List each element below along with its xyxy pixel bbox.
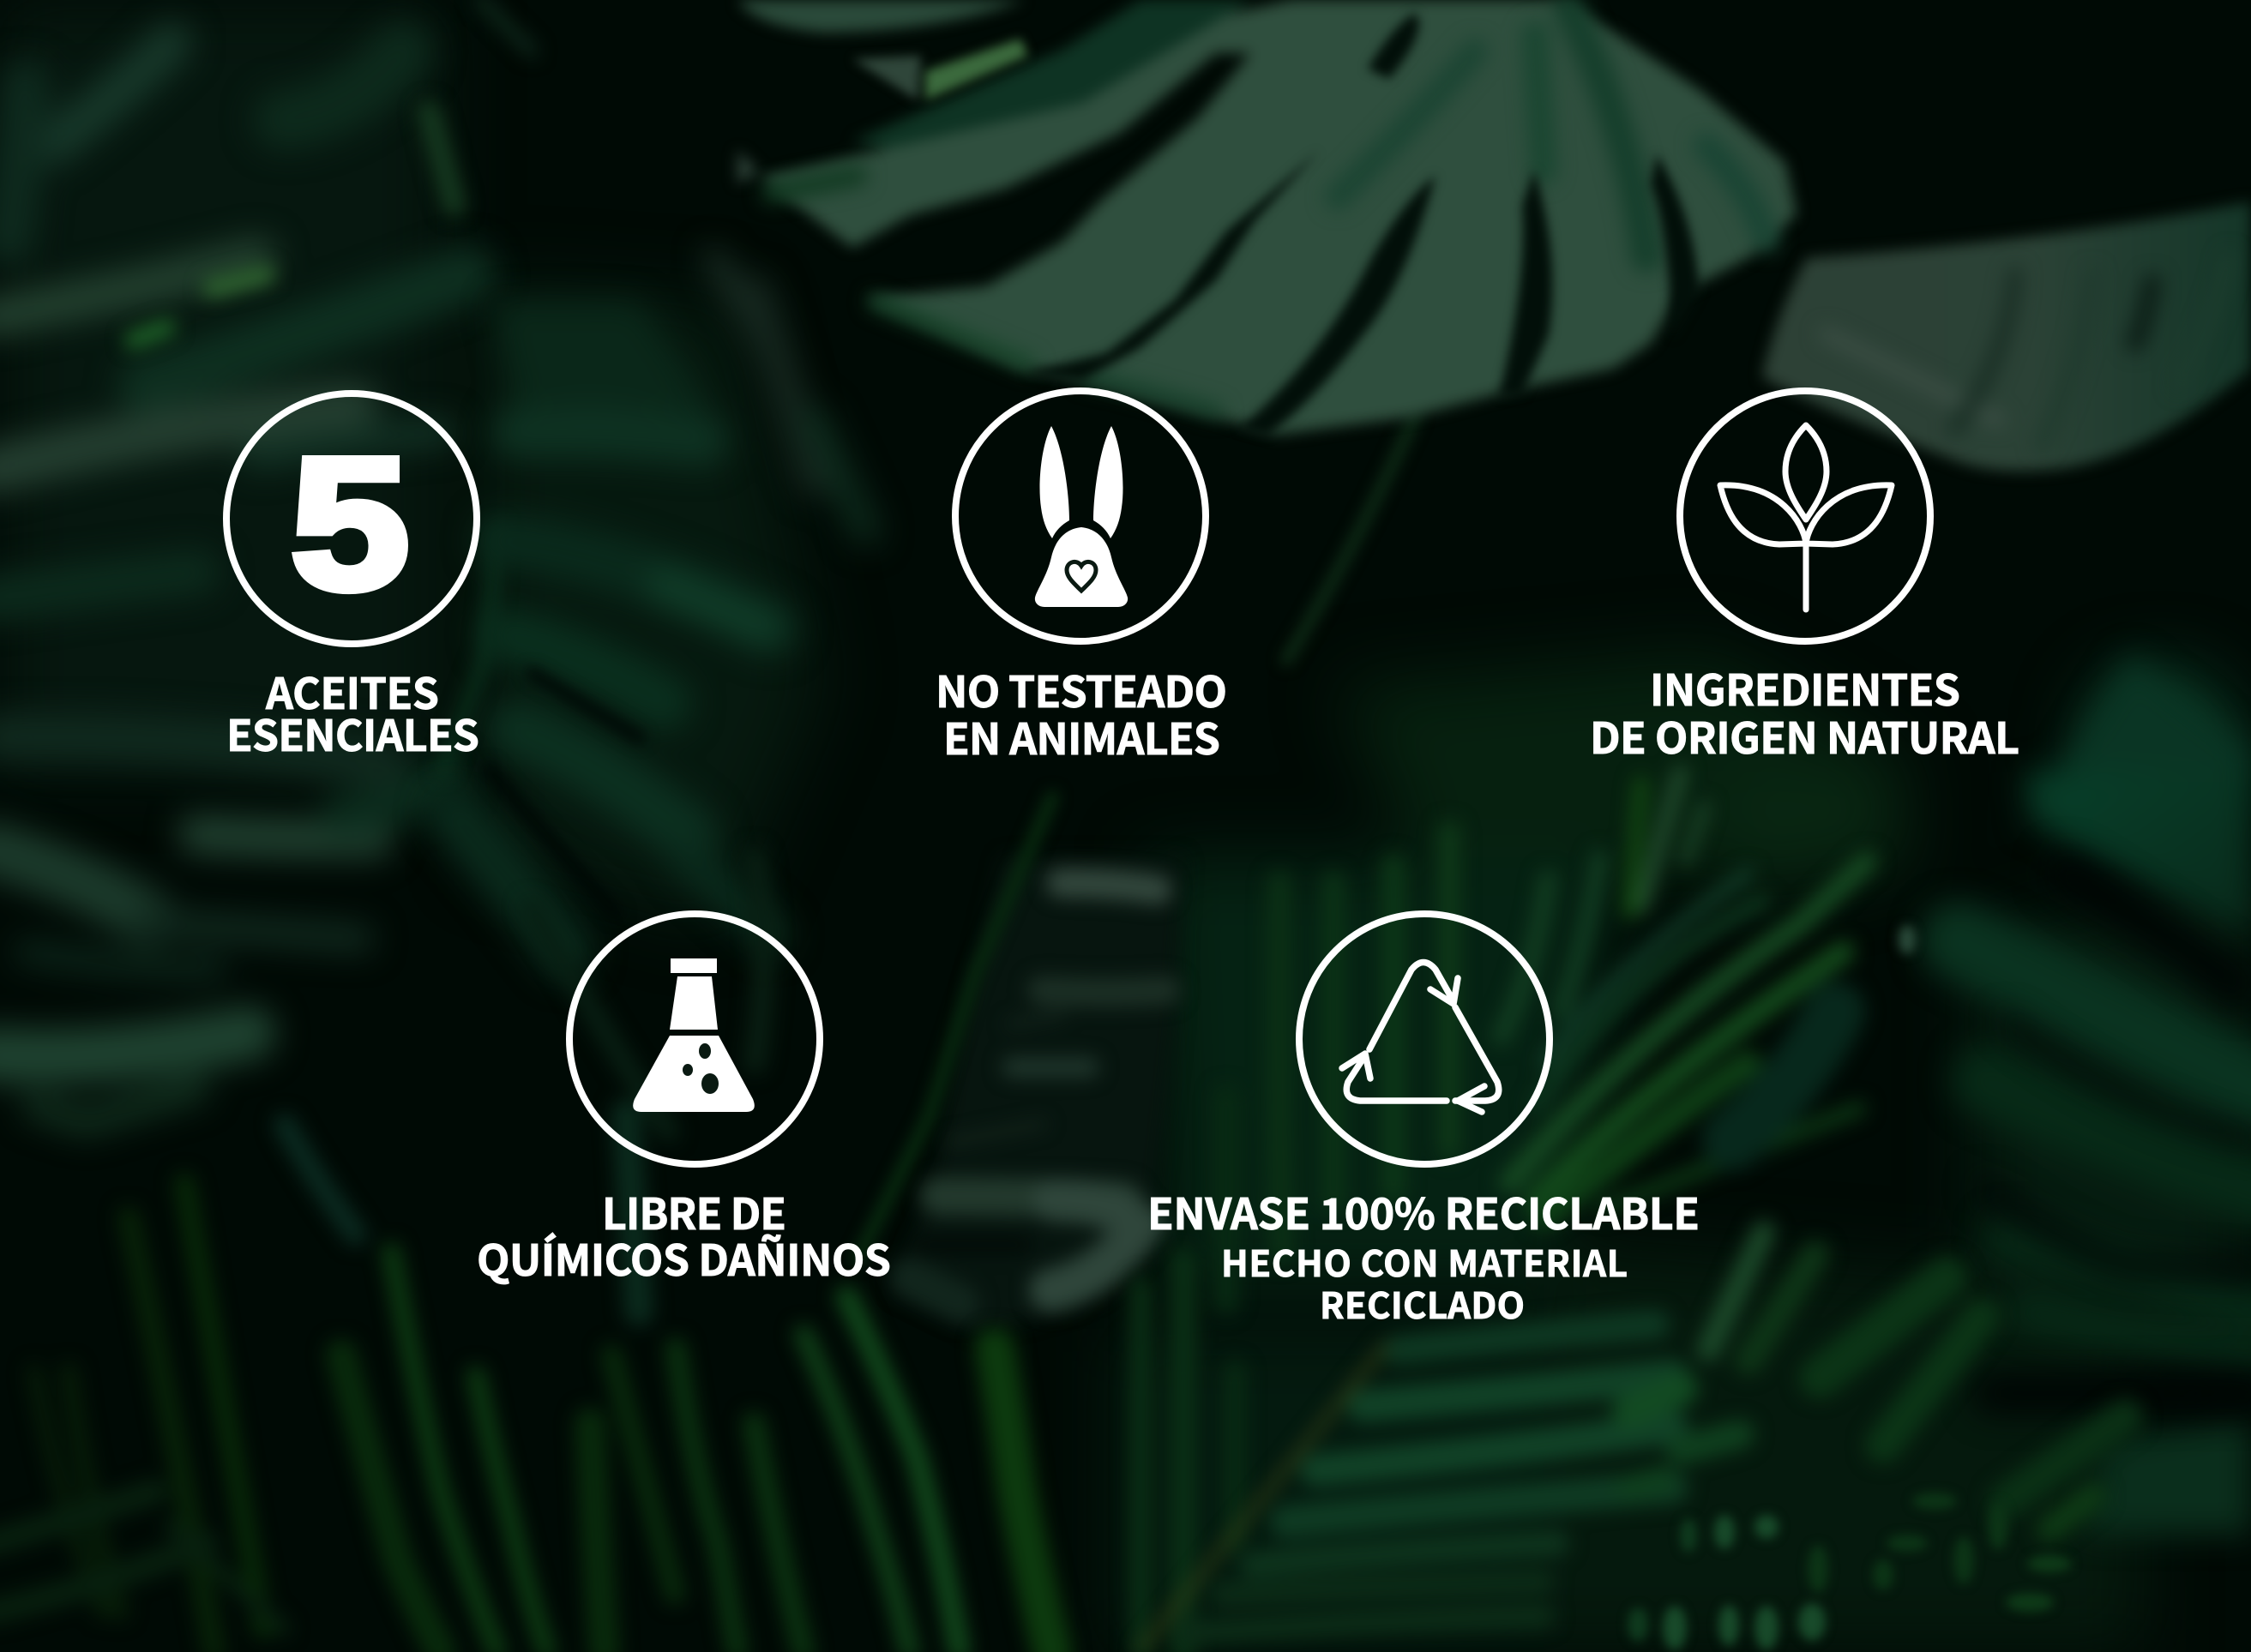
label: RECICLADO <box>1320 1277 1525 1330</box>
label: EN ANIMALES <box>943 706 1220 767</box>
panel: no testeado en animales <box>936 391 1227 767</box>
label: NO TESTEADO <box>936 658 1227 720</box>
central lobed leaf <box>454 257 866 952</box>
label: ACEITES <box>265 660 439 722</box>
right side leaves <box>1959 653 2251 1535</box>
icon: number 5 in circle <box>226 393 477 644</box>
icon: rabbit in circle <box>955 391 1206 641</box>
label: ENVASE 100% RECICLABLE <box>1147 1180 1700 1242</box>
label <box>477 1180 891 1289</box>
label: INGREDIENTES <box>1650 657 1960 718</box>
top right pale leaf <box>1762 201 2251 471</box>
label: ESENCIALES <box>226 702 479 764</box>
label <box>1590 657 2019 766</box>
fern lower right <box>1141 1232 2125 1650</box>
label: HECHO CON MATERIAL <box>1221 1235 1628 1288</box>
top monstera leaf <box>737 0 1797 435</box>
label <box>226 660 479 764</box>
panel: libre de químicos dañinos <box>477 914 891 1289</box>
panel: envase 100% reciclable <box>1147 914 1700 1330</box>
upper left leaf bands <box>0 43 467 1123</box>
palm strips lower left <box>0 857 1052 1652</box>
label: DE ORIGEN NATURAL <box>1590 705 2019 766</box>
label <box>1147 1180 1700 1330</box>
panel: 5 aceites esenciales <box>226 393 479 764</box>
label <box>936 658 1227 767</box>
label: QUÍMICOS DAÑINOS <box>477 1227 891 1289</box>
icon: recycling triangle in circle <box>1299 914 1550 1164</box>
middle grey leaf <box>894 857 1183 1334</box>
icon: plant in circle <box>1680 391 1930 641</box>
icon: number 5 in circle: 5 <box>291 418 409 628</box>
icon: flask in circle <box>569 914 820 1164</box>
palm fan upper right of lower half <box>1141 772 1867 1652</box>
label: LIBRE DE <box>602 1180 786 1242</box>
panel: ingredientes de origen natural <box>1590 391 2019 766</box>
